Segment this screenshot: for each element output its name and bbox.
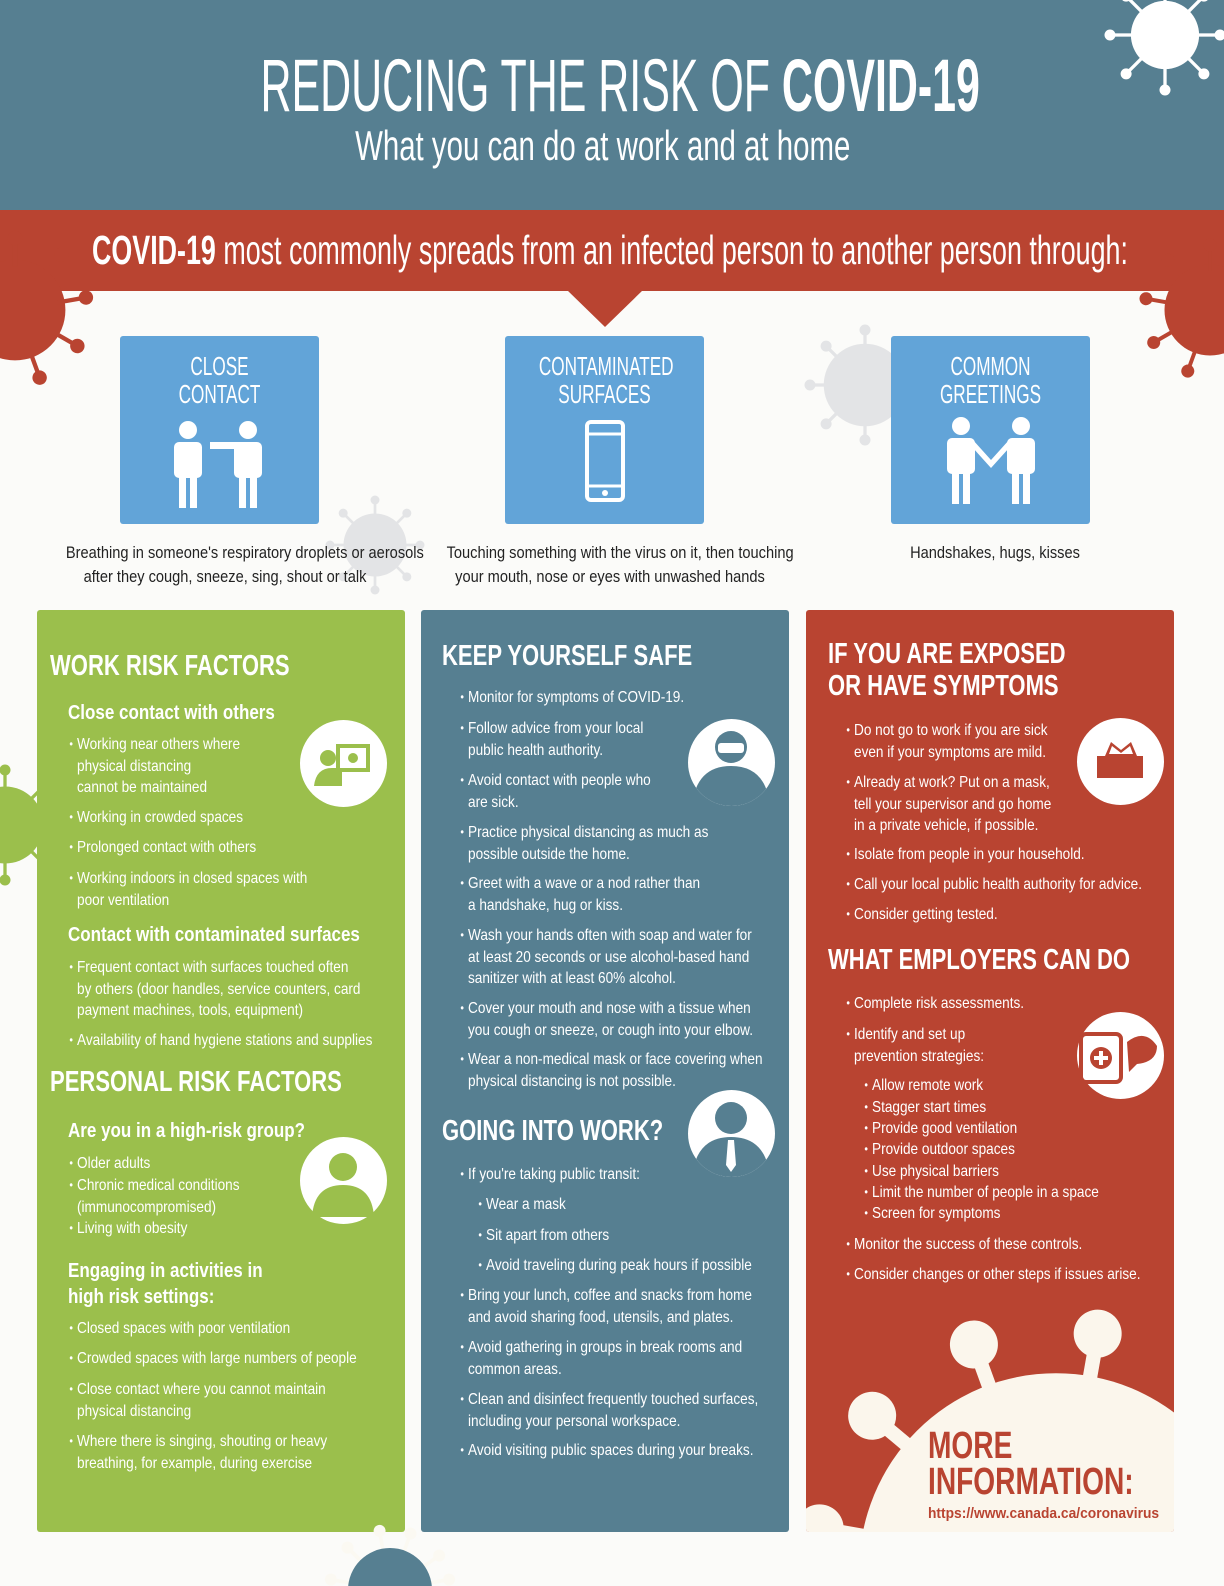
panel: risk factors: Working near others where: [77, 736, 240, 753]
virus: red right: [1140, 291, 1224, 378]
panel: risk factors: Working indoors in closed spaces with: [77, 870, 307, 887]
caption: close contact: [66, 543, 424, 586]
panel: keep yourself safe: Avoid traveling during peak hours if possible: [486, 1257, 752, 1274]
panel: keep yourself safe: Bring your lunch, coffee and snacks from home: [468, 1287, 752, 1304]
panel: keep yourself safe: and avoid sharing food, utensils, and plates.: [468, 1308, 733, 1326]
panel: keep yourself safe: physical distancing is not possible.: [468, 1072, 676, 1090]
panel: risk factors: Close contact where you cannot maintain: [77, 1381, 326, 1398]
panel: keep yourself safe: Avoid gathering in groups in break rooms and: [468, 1339, 742, 1356]
more information: INFORMATION:: [928, 1461, 1134, 1503]
panel: keep yourself safe: Avoid visiting public spaces during your breaks.: [468, 1442, 754, 1459]
panel: keep yourself safe: sanitizer with at least 60% alcohol.: [468, 970, 676, 987]
box: close contact: [120, 336, 319, 524]
box: common greetings: [891, 336, 1090, 524]
caption: close contact: after they cough, sneeze, sing, shout or talk: [84, 567, 366, 586]
panel: keep yourself safe: Practice physical distancing as much as: [468, 824, 708, 841]
icon: clipboard: [1077, 1012, 1164, 1099]
panel: keep yourself safe: Wear a mask: [486, 1196, 566, 1213]
caption: surfaces: [446, 543, 794, 586]
heading: exposed: IF YOU ARE EXPOSED: [828, 638, 1066, 670]
panel: risk factors: Frequent contact with surfaces touched often: [77, 959, 348, 976]
panel: keep yourself safe: Greet with a wave or a nod rather than: [468, 875, 700, 892]
panel: keep yourself safe: If you're taking public transit:: [468, 1166, 640, 1183]
more information: [928, 1425, 1134, 1503]
panel: exposed / employers: Screen for symptoms: [872, 1205, 1000, 1222]
virus: more information backdrop: [806, 1310, 1174, 1532]
panel: exposed / employers: Already at work? Put on a mask,: [854, 774, 1050, 791]
icon: sick person: [300, 1137, 387, 1224]
panel: risk factors: physical distancing: [77, 1402, 191, 1420]
panel: exposed / employers: Consider getting tested.: [854, 906, 998, 923]
box: contaminated surfaces: SURFACES: [558, 379, 651, 409]
panel: exposed / employers: Complete risk assessments.: [854, 995, 1024, 1012]
box: contaminated surfaces: CONTAMINATED: [539, 351, 674, 381]
panel: keep yourself safe: Wash your hands often with soap and water for: [468, 927, 752, 944]
caption: greetings: Handshakes, hugs, kisses: [910, 543, 1080, 562]
icon: person at computer: [300, 720, 387, 807]
panel: risk factors: Crowded spaces with large numbers of people: [77, 1350, 357, 1367]
panel: risk factors: physical distancing: [77, 758, 191, 774]
icon: worker: [688, 1090, 775, 1177]
virus: header top right: [1104, 0, 1224, 96]
heading: personal risk factors: PERSONAL RISK FACTORS: [50, 1066, 342, 1098]
panel: exposed / employers: Call your local public health authority for advice.: [854, 876, 1142, 893]
url: https://www.canada.ca/coronavirus: [928, 1505, 1159, 1522]
subheading: Close contact with others: [68, 702, 275, 724]
panel: keep yourself safe: Sit apart from others: [486, 1227, 609, 1244]
subheading: [68, 1260, 263, 1308]
panel: keep yourself safe: Follow advice from your local: [468, 720, 643, 737]
panel: keep yourself safe: including your personal workspace.: [468, 1412, 680, 1430]
panel: risk factors: cannot be maintained: [77, 779, 207, 796]
box: common greetings: GREETINGS: [940, 379, 1041, 409]
heading: exposed: OR HAVE SYMPTOMS: [828, 670, 1059, 702]
red band: [0, 210, 1224, 291]
panel: exposed / employers: Allow remote work: [872, 1077, 983, 1094]
heading: KEEP YOURSELF SAFE: [442, 640, 692, 672]
panel: keep yourself safe: public health authority.: [468, 742, 603, 758]
subheading: Are you in a high-risk group?: [68, 1120, 305, 1142]
panel: risk factors: Living with obesity: [77, 1220, 187, 1237]
panel: keep yourself safe: Clean and disinfect frequently touched surfaces,: [468, 1391, 758, 1408]
panel: keep yourself safe: Monitor for symptoms of COVID-19.: [468, 689, 684, 706]
box: common greetings: COMMON: [950, 351, 1031, 381]
panel: risk factors: Where there is singing, shouting or heavy: [77, 1433, 327, 1450]
panel: exposed / employers: in a private vehicle, if possible.: [854, 817, 1038, 834]
panel: exposed / employers: Provide outdoor spaces: [872, 1141, 1015, 1158]
icon: masked person: [688, 719, 775, 806]
virus: gray near close contact: [326, 496, 424, 594]
box: contaminated surfaces: [505, 336, 704, 524]
panel: exposed / employers: Stagger start times: [872, 1099, 986, 1116]
panel: risk factors: Closed spaces with poor ventilation: [77, 1320, 290, 1337]
icon: phone: [585, 420, 625, 502]
panel: keep yourself safe: Wear a non-medical mask or face covering when: [468, 1051, 763, 1068]
panel: keep yourself safe: you cough or sneeze, or cough into your elbow.: [468, 1022, 753, 1038]
heading: work risk factors: WORK RISK FACTORS: [50, 650, 290, 682]
box: close contact: CONTACT: [179, 379, 260, 409]
panel: keep yourself safe: common areas.: [468, 1360, 562, 1378]
panel: risk factors: by others (door handles, service counters, card: [77, 980, 360, 998]
title: REDUCING THE RISK OF COVID-19: [260, 44, 980, 127]
panel: exposed / employers: prevention strategies:: [854, 1048, 984, 1064]
caption: surfaces: Touching something with the virus on it, then touching: [447, 543, 794, 562]
panel: exposed / employers: [806, 610, 1174, 1532]
panel: keep yourself safe: Cover your mouth and nose with a tissue when: [468, 1000, 751, 1017]
panel: keep yourself safe: Avoid contact with people who: [468, 772, 651, 789]
arrow: band pointer: [567, 290, 643, 327]
box: close contact: CLOSE: [190, 351, 249, 381]
caption: surfaces: your mouth, nose or eyes with unwashed hands: [455, 567, 765, 586]
panel: exposed / employers: Use physical barriers: [872, 1163, 999, 1180]
band text: COVID-19 most commonly spreads from an infected person to another person through:: [92, 227, 1128, 273]
panel: risk factors: payment machines, tools, equipment): [77, 1002, 303, 1019]
panel: keep yourself safe: a handshake, hug or kiss.: [468, 896, 623, 914]
subheading: Contact with contaminated surfaces: [68, 924, 360, 946]
panel: risk factors: (immunocompromised): [77, 1198, 216, 1216]
panel: exposed / employers: tell your supervisor and go home: [854, 796, 1051, 812]
header: [0, 0, 1224, 212]
icon: tissue box: [1077, 718, 1164, 805]
heading: exposed: [828, 638, 1066, 702]
virus: gray near greetings: [804, 324, 891, 446]
panel: keep yourself safe: are sick.: [468, 794, 519, 810]
icon: two people: [174, 421, 262, 508]
panel: risk factors: Working in crowded spaces: [77, 809, 243, 826]
virus: green left: [0, 764, 37, 886]
panel: exposed / employers: Limit the number of people in a space: [872, 1184, 1099, 1201]
more information: MORE: [928, 1425, 1012, 1467]
virus: bottom blue: [348, 1524, 432, 1586]
panel: risk factors: poor ventilation: [77, 892, 169, 908]
panel: risk factors: Chronic medical conditions: [77, 1177, 240, 1194]
panel: exposed / employers: Monitor the success of these controls.: [854, 1236, 1082, 1253]
panel: risk factors: Older adults: [77, 1155, 150, 1172]
panel: risk factors: [37, 610, 405, 1532]
subtitle: What you can do at work and at home: [355, 122, 851, 169]
panel: keep yourself safe: [421, 610, 789, 1532]
panel: exposed / employers: Provide good ventilation: [872, 1120, 1017, 1137]
panel: risk factors: breathing, for example, during exercise: [77, 1454, 312, 1472]
panel: exposed / employers: even if your symptoms are mild.: [854, 744, 1046, 760]
panel: risk factors: Availability of hand hygiene stations and supplies: [77, 1032, 372, 1049]
panel: exposed / employers: Identify and set up: [854, 1026, 965, 1043]
panel: keep yourself safe: possible outside the home.: [468, 846, 630, 862]
panel: exposed / employers: Do not go to work if you are sick: [854, 722, 1048, 739]
heading: employers: WHAT EMPLOYERS CAN DO: [828, 944, 1130, 976]
subheading: Engaging in activities in: [68, 1260, 263, 1282]
heading: going into work: GOING INTO WORK?: [442, 1115, 663, 1147]
panel: keep yourself safe: at least 20 seconds or use alcohol-based hand: [468, 948, 749, 966]
virus: red left: [0, 291, 94, 385]
panel: exposed / employers: Isolate from people in your household.: [854, 846, 1085, 863]
panel: exposed / employers: Consider changes or other steps if issues arise.: [854, 1266, 1141, 1283]
panel: risk factors: Prolonged contact with others: [77, 839, 256, 856]
caption: close contact: Breathing in someone's respiratory droplets or aerosols: [66, 543, 424, 562]
subheading: high risk settings:: [68, 1286, 214, 1308]
icon: handshake: [947, 417, 1035, 504]
